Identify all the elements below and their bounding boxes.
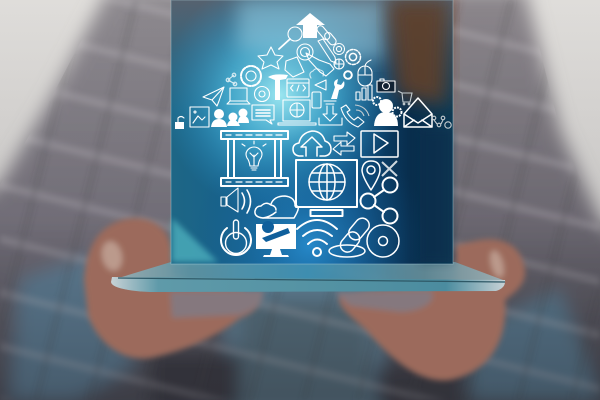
- icon: chain link with disc: [329, 215, 372, 257]
- icon: small cog: [344, 71, 352, 79]
- icon: power button: [221, 220, 251, 255]
- icon: chat bubble: [252, 105, 274, 124]
- icon: bar chart: [356, 85, 372, 100]
- icon: wifi: [297, 220, 337, 256]
- icon: paper plane: [203, 87, 224, 106]
- icon: cloud upload: [293, 131, 331, 156]
- icon: repair monitor: [256, 221, 296, 257]
- icon: smartphone: [312, 92, 321, 108]
- hologram panel: [171, 0, 453, 264]
- tablet edge: [111, 277, 505, 292]
- icon: share nodes: [360, 178, 398, 224]
- icon: envelope: [404, 98, 432, 127]
- icon: picture frame: [190, 107, 209, 127]
- icon: laptop with globe: [278, 100, 316, 125]
- icon: light bulb: [242, 141, 266, 170]
- icon: exchange arrows: [333, 132, 355, 155]
- icon: headset users: [211, 108, 249, 127]
- icon: phone handset: [341, 105, 364, 127]
- icon: wrench: [331, 79, 344, 99]
- icon: shopping cart: [398, 91, 412, 105]
- icon: target: [254, 86, 270, 102]
- icon: small cloud: [310, 69, 324, 78]
- icon: disc: [367, 225, 399, 257]
- icon: gear: [346, 50, 360, 64]
- left hand: [84, 218, 263, 358]
- icon: megaphone: [315, 80, 326, 90]
- tablet: [111, 262, 505, 292]
- icon: large gear: [241, 66, 261, 86]
- icon: user with gears: [373, 97, 402, 126]
- icon: touch pointer: [297, 44, 334, 76]
- icon: pencil: [318, 39, 336, 63]
- icon: small gear: [334, 44, 344, 54]
- icon: hammer: [268, 74, 288, 100]
- icon: up arrow: [296, 13, 325, 38]
- icon: magnifier: [279, 27, 302, 49]
- icon: mouse: [358, 60, 372, 86]
- icon: speaker: [221, 188, 250, 213]
- icon: star: [258, 47, 283, 69]
- icon house: [175, 13, 451, 257]
- icon: network nodes: [432, 116, 451, 128]
- icon: laptop: [227, 88, 250, 104]
- icon: molecule network: [226, 73, 237, 86]
- icon: film strip: [221, 131, 288, 186]
- icon: code browser: [287, 79, 309, 97]
- icon: monitor with globe: [296, 160, 357, 216]
- icon: chain link: [316, 24, 338, 46]
- right hand: [335, 239, 525, 380]
- icon: signal arcs: [355, 105, 369, 116]
- icon: price tag: [285, 57, 304, 77]
- icon: camera: [377, 79, 395, 92]
- icon: location pin: [362, 161, 380, 190]
- icon: clouds: [255, 196, 298, 218]
- icon: play screen: [361, 131, 398, 157]
- icon: small globe: [334, 59, 344, 69]
- icon: open padlock: [175, 116, 184, 129]
- icon: crossed tools: [382, 161, 397, 176]
- tablet top surface: [112, 262, 503, 280]
- icon: download tray: [319, 101, 342, 125]
